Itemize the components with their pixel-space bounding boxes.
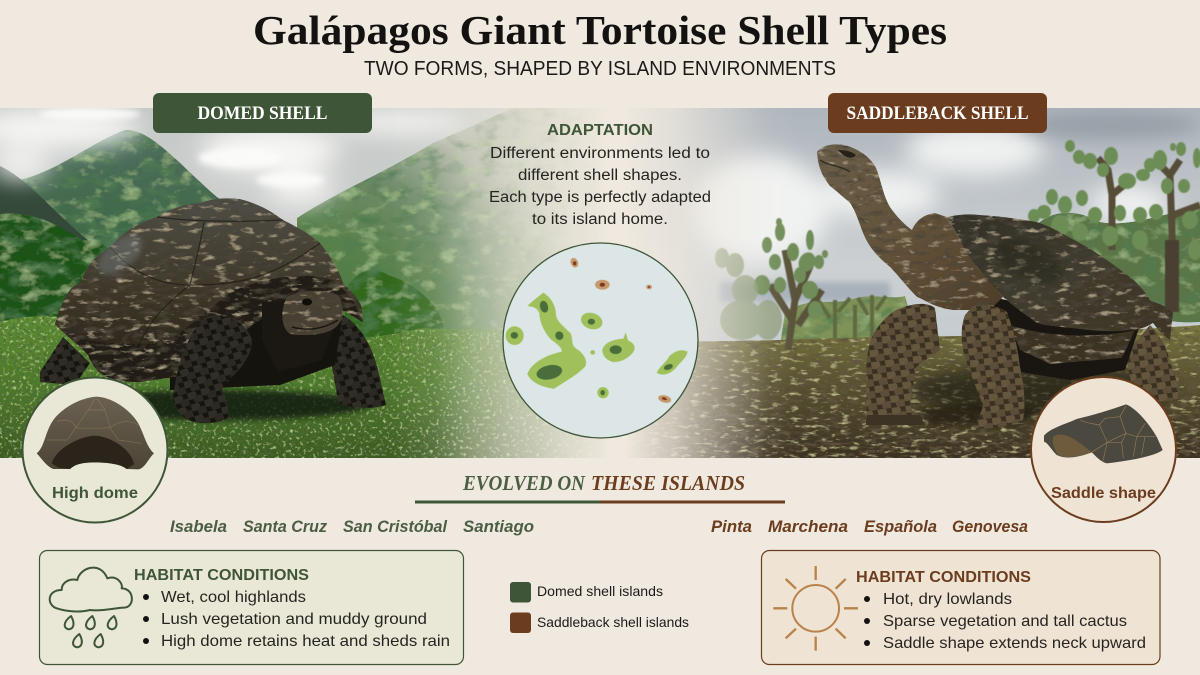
legend: Saddleback shell islands — [537, 614, 689, 630]
legend — [510, 582, 689, 633]
label: domed shell — [153, 93, 372, 133]
saddle shell — [947, 214, 1173, 340]
saddleback shell island names — [711, 517, 1028, 536]
label: saddleback shell — [828, 93, 1047, 133]
saddleback shell island names: Española — [864, 517, 937, 536]
saddleback islands — [569, 257, 672, 404]
saddleback tortoise — [817, 144, 1178, 428]
domed shell island names: Santiago — [463, 517, 534, 536]
icon: rain cloud — [50, 568, 132, 647]
rear leg — [40, 337, 90, 385]
saddleback shell island names: Marchena — [768, 517, 848, 536]
body shadow — [170, 310, 344, 390]
near front leg — [962, 305, 1024, 428]
domed shell — [55, 198, 363, 382]
adaptation text block — [489, 122, 711, 228]
panel: wet habitat conditions: HABITAT CONDITIONS — [134, 567, 309, 584]
domed shell island names — [170, 517, 534, 536]
adaptation text block: different shell shapes. — [518, 167, 682, 184]
adaptation text block: ADAPTATION — [547, 122, 653, 139]
heading: evolved on these islands: EVOLVED ON — [462, 471, 586, 495]
right cactus grove — [1027, 140, 1200, 322]
panel: wet habitat conditions: Lush vegetation and muddy ground — [161, 611, 427, 628]
panel: wet habitat conditions — [40, 550, 464, 664]
panel: dry habitat conditions: Sparse vegetation and tall cactus — [883, 613, 1127, 630]
label: saddleback shell: SADDLEBACK SHELL — [846, 103, 1028, 124]
saddleback scene: arid lowlands — [634, 108, 1200, 458]
domed islands — [506, 293, 688, 398]
adaptation text block: to its island home. — [532, 211, 668, 228]
left cactus — [715, 218, 828, 350]
inset: saddle shape shell — [1031, 377, 1176, 522]
underbody — [994, 299, 1139, 380]
saddleback shell island names: Genovesa — [952, 517, 1028, 536]
far front leg — [866, 304, 940, 424]
hero photo band — [0, 105, 1200, 458]
panel: wet habitat conditions: High dome retains heat and sheds rain — [161, 633, 450, 650]
domed shell island names: Santa Cruz — [243, 517, 327, 536]
front leg — [173, 315, 252, 423]
domed tortoise — [40, 198, 386, 423]
dark forest bushes — [0, 213, 448, 345]
inset: saddle shape shell: Saddle shape — [1051, 485, 1156, 502]
heading: evolved on these islands — [415, 471, 785, 504]
domed shell island names: Isabela — [170, 517, 227, 536]
panel: wet habitat conditions: Wet, cool highlands — [161, 589, 306, 606]
ground — [636, 325, 1200, 458]
subtitle: TWO FORMS, SHAPED BY ISLAND ENVIRONMENTS — [364, 58, 836, 80]
grass foreground — [0, 316, 596, 458]
panel: dry habitat conditions — [762, 550, 1160, 664]
domed shell island names: San Cristóbal — [343, 517, 448, 536]
saddleback shell island names: Pinta — [711, 517, 752, 536]
panel: dry habitat conditions: Saddle shape extends neck upward — [883, 635, 1146, 652]
legend: Domed shell islands — [537, 583, 663, 599]
distant green scrub — [780, 296, 908, 340]
adaptation text block: Each type is perfectly adapted — [489, 189, 711, 206]
island map — [503, 243, 698, 438]
domed scene: misty highlands — [0, 108, 596, 458]
neck — [262, 301, 285, 319]
inset: high dome shell — [22, 378, 168, 522]
title: Galápagos Giant Tortoise Shell Types — [253, 7, 947, 53]
panel: dry habitat conditions: Hot, dry lowlands — [883, 591, 1012, 608]
label: domed shell: DOMED SHELL — [198, 103, 328, 124]
rear leg — [1125, 325, 1178, 402]
inset: high dome shell: High dome — [52, 485, 138, 502]
steel highlight on shell — [96, 234, 144, 276]
icon: sun — [773, 566, 858, 651]
far right leg — [328, 315, 386, 408]
heading: evolved on these islands: THESE ISLANDS — [591, 471, 745, 495]
neck and head — [817, 144, 1003, 310]
adaptation text block: Different environments led to — [490, 145, 710, 162]
panel: dry habitat conditions: HABITAT CONDITIONS — [856, 569, 1031, 586]
head — [282, 291, 343, 335]
